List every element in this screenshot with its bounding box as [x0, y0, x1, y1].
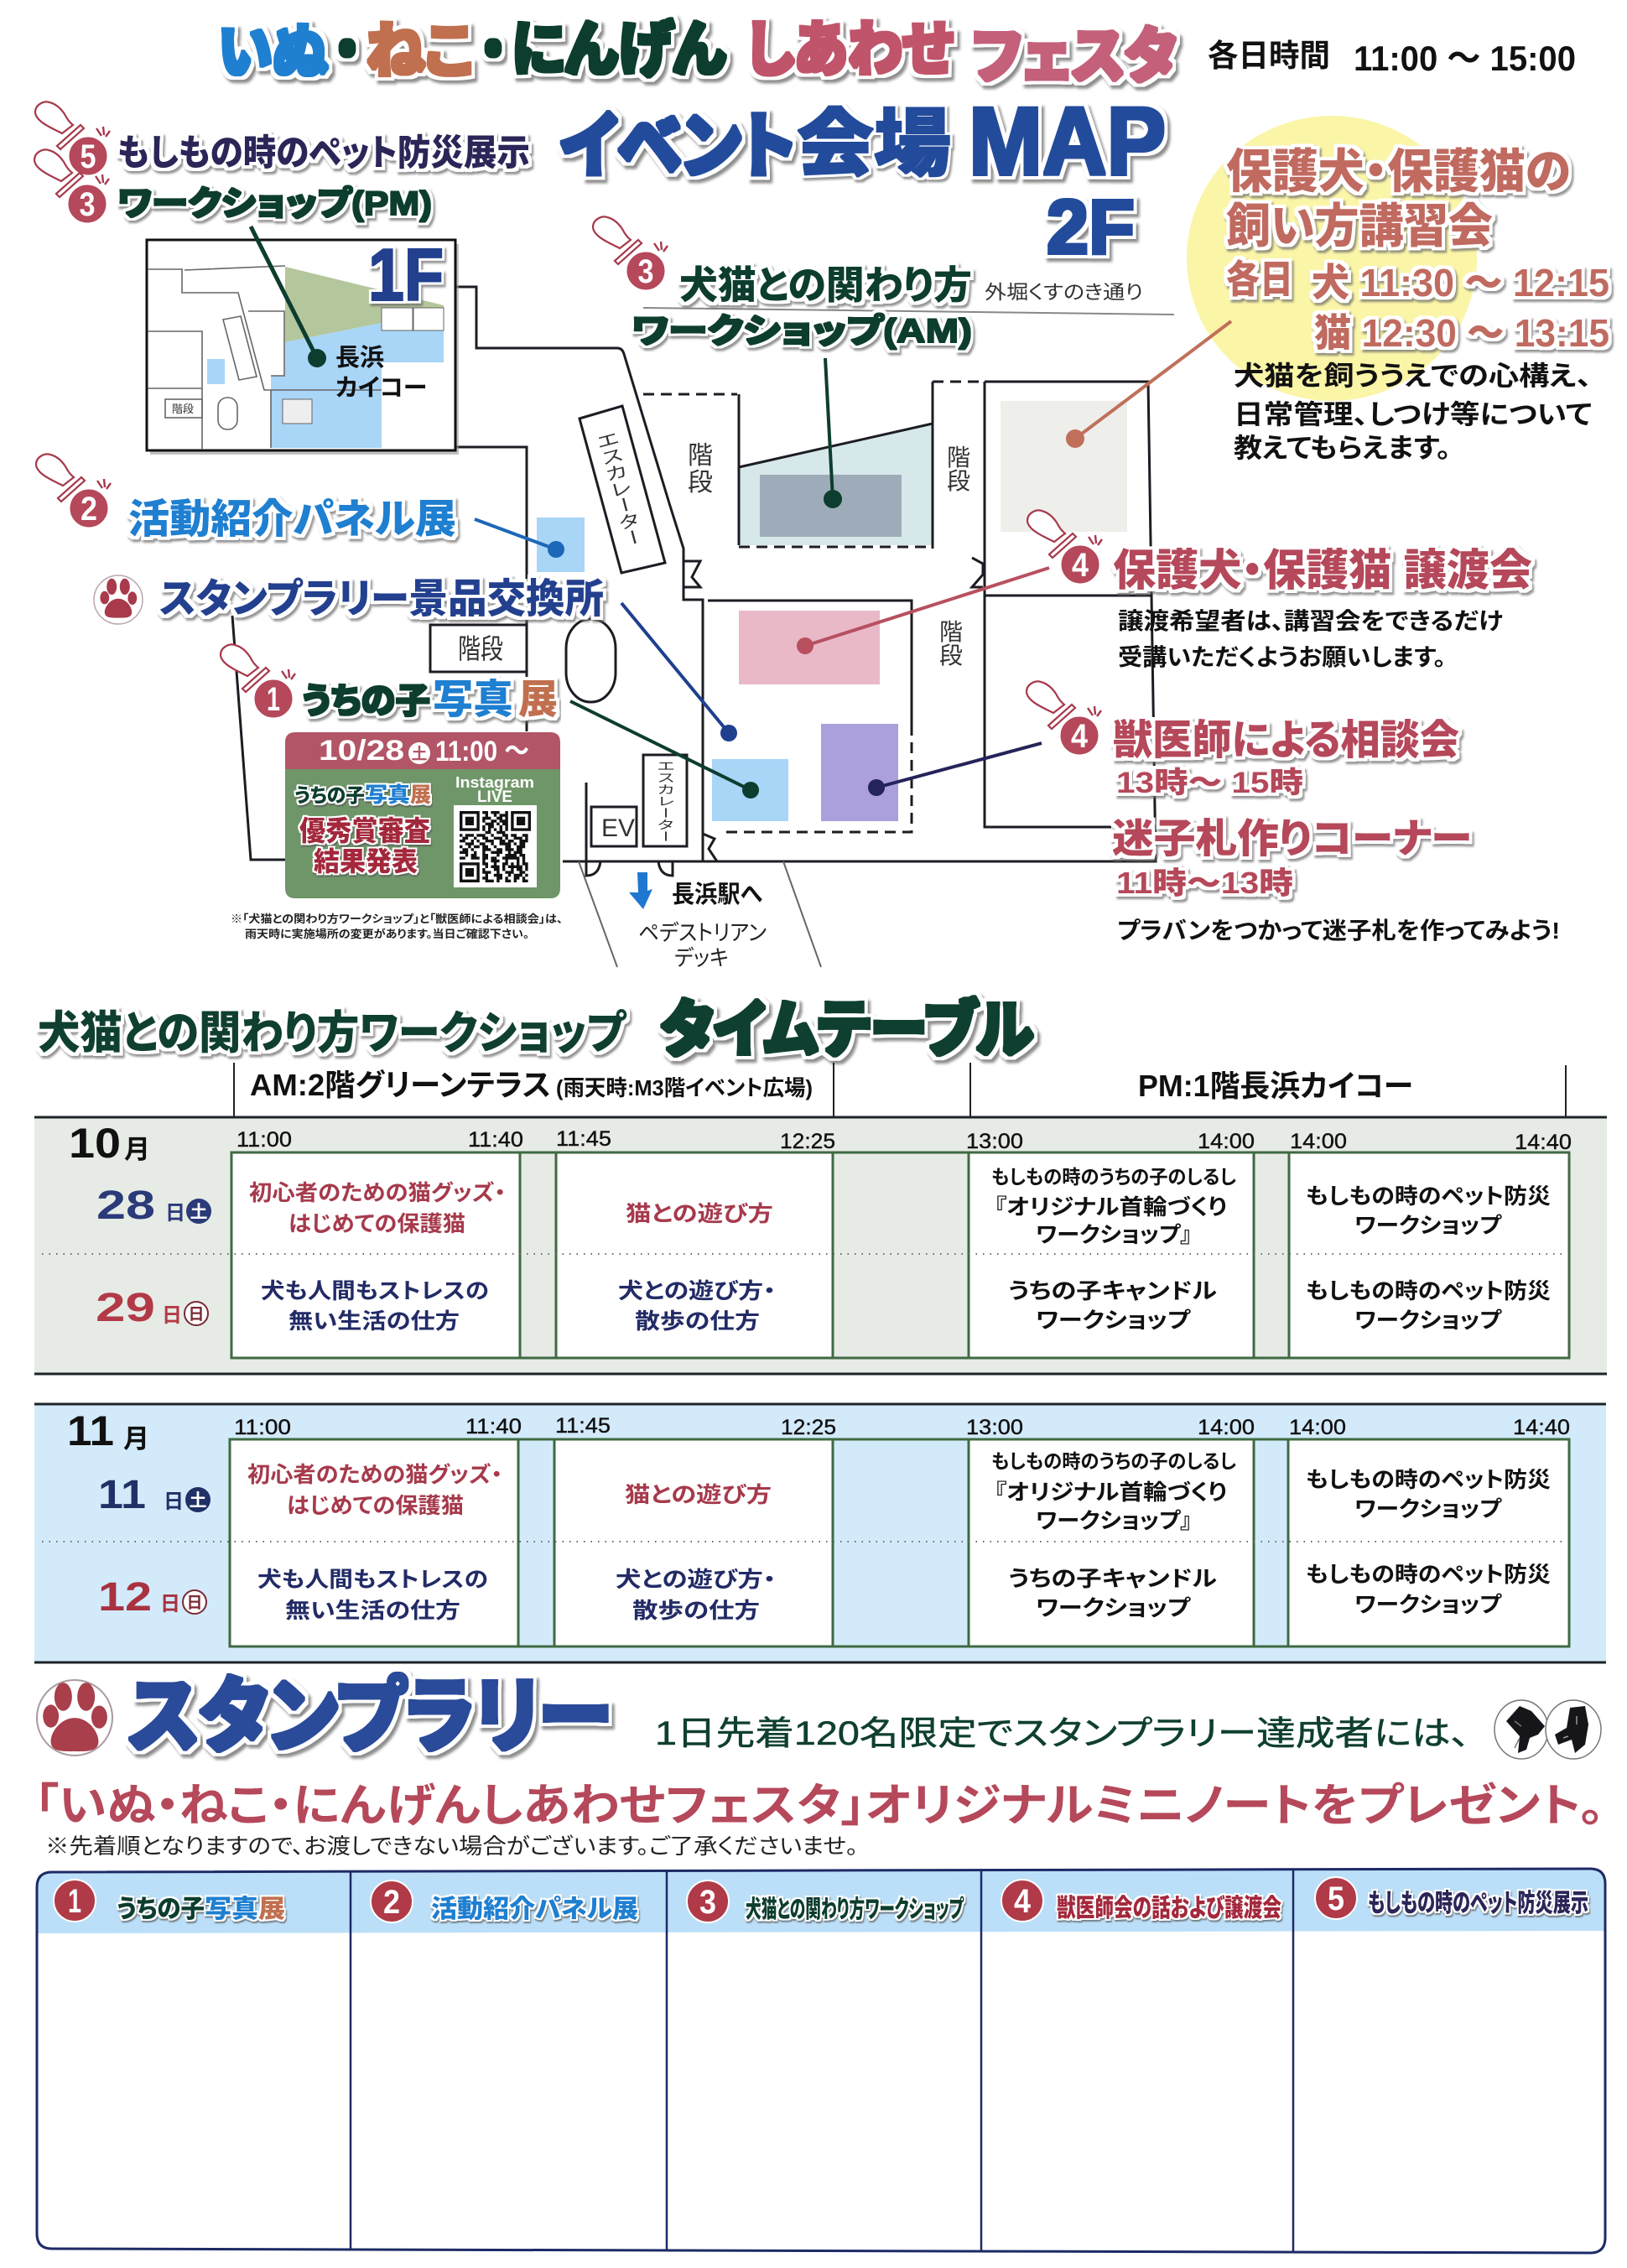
heading: workshop timetable: タイムテーブル: [661, 995, 1033, 1064]
October times: 12:25: [780, 1130, 835, 1153]
callout: lost pet tag corner: 11時〜13時: [1116, 866, 1293, 900]
card title: [294, 783, 431, 807]
October month: 月: [124, 1135, 150, 1164]
October times: 14:00: [1290, 1130, 1347, 1153]
title: ねこ: [366, 18, 474, 86]
date: 29 Sunday: 日: [188, 1306, 205, 1324]
callout 4: veterinary consultation: 13時〜 15時: [1116, 767, 1303, 799]
October month: 10: [69, 1120, 121, 1167]
date: 28 Saturday: 28: [96, 1183, 155, 1228]
October sessions: 猫との遊び方: [626, 1201, 773, 1226]
callout 4: adoption event: [1027, 510, 1532, 596]
date: 29 Sunday: 29: [96, 1286, 155, 1330]
November sessions: ワークショップ: [1354, 1496, 1502, 1522]
callout 3: workshop AM: 3: [637, 253, 654, 290]
card title: 展: [410, 783, 431, 807]
callout 1: photo exhibit: 1: [267, 681, 280, 718]
date: 10/28: [319, 735, 404, 767]
stamp cell 1: 1: [68, 1883, 81, 1920]
November sessions: 犬との遊び方・: [616, 1567, 776, 1592]
November sessions: 猫との遊び方: [625, 1482, 772, 1507]
icon: dog and cat: [1494, 1700, 1601, 1759]
stamp cell 5: [1315, 1877, 1588, 1919]
date: 28 Saturday: [96, 1183, 211, 1228]
panel exhibition area: [537, 518, 585, 572]
callout 5: pet disaster exhibit: 5: [81, 138, 96, 175]
street underline: [643, 308, 1174, 315]
October times: 11:45: [556, 1127, 611, 1151]
date: 29 Sunday: 日: [162, 1304, 182, 1327]
November sessions: 散歩の仕方: [632, 1598, 760, 1623]
November times: 14:00: [1198, 1416, 1255, 1439]
November sessions: 初心者のための猫グッズ・: [247, 1462, 502, 1487]
date: 11 Saturday: 日: [164, 1490, 184, 1513]
date: 28 Saturday: 土: [190, 1203, 208, 1222]
veterinarian area purple: [821, 724, 898, 821]
leader lines and dots: [475, 321, 1231, 798]
stairs label 2: 階: [947, 445, 970, 471]
inset map 1F: [147, 226, 459, 455]
callout 4: adoption event: 保護犬・保護猫 譲渡会: [1113, 547, 1532, 596]
QR code: [454, 805, 537, 887]
1F label: 1F: [368, 233, 444, 316]
heading: event venue map: MAP: [969, 88, 1166, 195]
opening hours: [1208, 39, 1576, 78]
arrow: to Nagahama station: [629, 872, 652, 909]
October times: 14:00: [1198, 1130, 1255, 1153]
stamp cell 1: 写真: [205, 1896, 258, 1923]
callout 1: photo exhibit: 写真: [433, 678, 513, 722]
callout 3: workshop PM: 3: [79, 186, 96, 223]
stairs label 2: 段: [947, 468, 970, 494]
callout 5: pet disaster exhibit: もしもの時のペット防災展示: [117, 133, 530, 174]
photo exhibition area blue: [712, 759, 788, 821]
adoption class description: 日常管理、しつけ等について: [1234, 399, 1592, 429]
stamp cell 4: 4: [1014, 1883, 1032, 1920]
rain notice: ※「犬猫との関わり方ワークショップ」と「獣医師による相談会」は、: [231, 913, 563, 925]
date: 11 Saturday: [98, 1473, 211, 1517]
callout 5: pet disaster exhibit: [35, 102, 530, 176]
street label: 外堀くすのき通り: [985, 281, 1143, 303]
stamp rally limit text: 1日先着120名限定でスタンプラリー達成者には、: [655, 1715, 1470, 1752]
callout: lost pet tag corner: [1112, 817, 1472, 900]
callout 4: veterinary consultation: 獣医師による相談会: [1113, 718, 1459, 763]
title: しあわせ: [746, 17, 954, 84]
stairs label 1: 段: [688, 469, 713, 497]
stamp cell 3: 犬猫との関わり方ワークショップ: [746, 1896, 964, 1923]
building walls: [232, 287, 1156, 967]
November sessions: 犬も人間もストレスの: [257, 1567, 488, 1592]
stamp cell 3: 3: [699, 1884, 716, 1921]
title: いぬ: [218, 19, 328, 86]
first come notice: ※先着順となりますので、お渡しできない場合がございます。ご了承くださいませ。: [45, 1834, 858, 1859]
station label: 長浜駅へ: [672, 881, 763, 908]
stairs label 1: 階: [688, 442, 713, 470]
date: 11:00 〜: [435, 736, 529, 767]
stamp cell 1: [54, 1880, 285, 1923]
callout 3: workshop AM: ワークショップ(AM): [632, 313, 972, 350]
escalator label 2: エスカレーター: [654, 760, 676, 842]
heading: workshop timetable: 犬猫との関わり方ワークショップ: [38, 1008, 626, 1059]
November times: 11:45: [555, 1414, 611, 1438]
October sessions: 散歩の仕方: [635, 1308, 760, 1334]
rain notice: 雨天時に実施場所の変更があります。当日ご確認下さい。: [245, 928, 529, 940]
November sessions: [247, 1450, 1551, 1623]
October sessions: ワークショップ: [1036, 1308, 1191, 1333]
callout 3: workshop PM: ワークショップ(PM): [117, 185, 432, 222]
panel: stamp card: [37, 1869, 1605, 2253]
November cells: [42, 1439, 1569, 1646]
rain venue: (雨天時:M3階イベント広場): [556, 1075, 813, 1100]
October sessions: ワークショップ』: [1036, 1222, 1192, 1247]
November times: 14:00: [1289, 1416, 1346, 1439]
rain notice: [231, 913, 563, 940]
date: 12 Sunday: 日: [186, 1594, 203, 1612]
stamp cell 1: うちの子: [117, 1896, 205, 1923]
present text: 「いぬ・ねこ・にんげんしあわせフェスタ」オリジナルミニノートをプレゼント。: [34, 1781, 1604, 1831]
adoption event description: 受講いただくようお願いします。: [1118, 644, 1446, 670]
date: 11 Saturday: 土: [190, 1491, 206, 1511]
November sessions: 『オリジナル首輪づくり: [995, 1480, 1227, 1505]
opening hours: 11:00 〜 15:00: [1354, 39, 1576, 78]
November times: 11:00: [234, 1416, 291, 1439]
stamp cell 1: 展: [258, 1896, 285, 1923]
October times: 11:00: [237, 1128, 292, 1152]
card title: 写真: [365, 783, 410, 807]
adoption area pink: [739, 611, 880, 684]
callout 4: veterinary consultation: [1027, 681, 1459, 799]
callout: adoption class: 各日: [1226, 257, 1293, 301]
adoption class room: [1001, 401, 1127, 532]
deck label: [638, 920, 767, 970]
floor map 2F: [232, 281, 1174, 970]
stairs label 4: 階段: [458, 633, 503, 664]
callout 2: activity panels: 活動紹介パネル展: [128, 497, 456, 542]
October sessions: 犬も人間もストレスの: [261, 1278, 489, 1303]
title: [218, 17, 1177, 91]
yellow circle behind adoption class: [1187, 116, 1477, 401]
card: instagram live announcement: [285, 732, 560, 898]
title: フェスタ: [972, 23, 1177, 91]
October sessions: うちの子キャンドル: [1008, 1278, 1217, 1303]
October times: 11:40: [468, 1128, 523, 1152]
map labels: [458, 281, 1143, 842]
heading: 2F: 2F: [1047, 185, 1135, 270]
stamp cell 3: [687, 1880, 964, 1923]
callout: stamp rally prize exchange: スタンプラリー景品交換所: [159, 577, 604, 622]
November sessions: うちの子キャンドル: [1008, 1566, 1217, 1591]
heading: event venue map: イベント: [560, 107, 795, 187]
November times: [234, 1414, 1570, 1439]
October times: 14:40: [1515, 1131, 1572, 1154]
callout 1: photo exhibit: 展: [518, 678, 558, 722]
deck label: デッキ: [674, 945, 729, 970]
date: 29 Sunday: [96, 1286, 208, 1330]
callout: adoption class: 飼い方講習会: [1226, 200, 1493, 252]
November sessions: ワークショップ: [1354, 1592, 1502, 1617]
November times: 12:25: [781, 1416, 836, 1439]
callout: lost pet tag corner: 迷子札作りコーナー: [1112, 817, 1472, 861]
Nagahama Kaiko label: カイコー: [335, 375, 427, 402]
date: [319, 735, 529, 767]
terrace area: [739, 424, 933, 545]
November sessions: もしもの時のペット防災: [1306, 1467, 1551, 1492]
callout: adoption class: 保護犬・保護猫の: [1226, 145, 1571, 198]
heading: stamp rally: スタンプラリー: [128, 1670, 612, 1762]
instagram live label: Instagram: [455, 774, 534, 791]
callout: adoption class: [1226, 145, 1609, 355]
callout 3: workshop AM: [593, 216, 972, 350]
heading: event venue map: [560, 88, 1166, 195]
date: 12 Sunday: 12: [98, 1575, 152, 1620]
AM venue: AM:2階グリーンテラス: [250, 1068, 551, 1102]
November month: [67, 1407, 149, 1454]
award announcement: 結果発表: [314, 846, 418, 877]
heading: workshop timetable: [38, 995, 1033, 1064]
October sessions: もしもの時のうちの子のしるし: [991, 1166, 1236, 1188]
line to venue: [251, 226, 317, 358]
lost pet tag description: プラバンをつかって迷子札を作ってみよう!: [1117, 918, 1560, 944]
award announcement: [299, 815, 430, 877]
adoption class description: 犬猫を飼ううえでの心構え、: [1234, 361, 1592, 391]
October sessions: もしもの時のペット防災: [1306, 1278, 1551, 1303]
adoption event description: [1118, 608, 1503, 670]
adoption class description: [1234, 361, 1592, 463]
November sessions: ワークショップ』: [1036, 1508, 1192, 1533]
PM venue: PM:1階長浜カイコー: [1138, 1069, 1413, 1103]
timetable column headers: [234, 1063, 1566, 1118]
November sessions: ワークショップ: [1036, 1595, 1191, 1620]
October month: [69, 1120, 150, 1167]
escalator label 1: エスカレーター: [591, 429, 647, 549]
date: 12 Sunday: 日: [160, 1593, 180, 1615]
November sessions: はじめての保護猫: [287, 1493, 464, 1518]
heading: event venue map: 会場: [797, 102, 951, 185]
icon: paw print: [37, 1680, 112, 1756]
award announcement: 優秀賞審査: [299, 815, 430, 846]
title: にんげん: [512, 17, 725, 84]
callout 4: adoption event: 4: [1072, 547, 1089, 584]
October cells: [42, 1152, 1569, 1358]
October sessions: はじめての保護猫: [288, 1211, 465, 1236]
panel: October timetable: [34, 1117, 1607, 1374]
date: 11 Saturday: 11: [98, 1473, 146, 1517]
adoption class description: 教えてもらえます。: [1234, 433, 1451, 463]
November sessions: もしもの時のうちの子のしるし: [991, 1450, 1236, 1472]
callout 4: veterinary consultation: 4: [1071, 718, 1089, 755]
November times: 14:40: [1513, 1416, 1570, 1439]
November sessions: 無い生活の仕方: [285, 1598, 460, 1623]
callout: adoption class: 犬 11:30 〜 12:15: [1312, 261, 1609, 304]
1F stairs labels: 階段: [172, 403, 194, 415]
date: 28 Saturday: 日: [165, 1202, 185, 1225]
October sessions: 初心者のための猫グッズ・: [249, 1180, 506, 1205]
EV label: EV: [601, 814, 635, 842]
date: 土: [411, 745, 428, 763]
stamp cell 2: 2: [383, 1884, 400, 1921]
callout 2: activity panels: [36, 455, 456, 542]
panel: November timetable: [34, 1404, 1606, 1662]
October times: 13:00: [966, 1130, 1023, 1153]
stairs label 3: 階: [939, 619, 963, 645]
October sessions: [249, 1166, 1551, 1334]
callout: adoption class: 猫 12:30 〜 13:15: [1314, 311, 1609, 355]
stamp cell 4: [1001, 1880, 1281, 1922]
November sessions: もしもの時のペット防災: [1306, 1562, 1551, 1587]
adoption event description: 譲渡希望者は、講習会をできるだけ: [1118, 608, 1503, 634]
November month: 月: [123, 1424, 149, 1454]
stamp cell 4: 獣医師会の話および譲渡会: [1057, 1895, 1281, 1922]
stamp cell 2: [371, 1880, 638, 1923]
November times: 13:00: [966, 1416, 1023, 1439]
callout 2: activity panels: 2: [81, 491, 97, 528]
opening hours: 各日時間: [1208, 39, 1330, 73]
title: ・: [335, 18, 360, 85]
October sessions: 『オリジナル首輪づくり: [995, 1194, 1227, 1220]
instagram live label: [455, 774, 534, 806]
November times: 11:40: [465, 1415, 522, 1438]
instagram live label: LIVE: [477, 788, 512, 806]
October times: [237, 1127, 1572, 1154]
card title: うちの子: [294, 784, 365, 806]
October sessions: 犬との遊び方・: [618, 1278, 776, 1303]
stamp cell 5: 5: [1328, 1880, 1344, 1917]
Nagahama Kaiko label: 長浜: [335, 344, 384, 372]
date: 12 Sunday: [98, 1575, 206, 1620]
November month: 11: [67, 1407, 114, 1454]
callout 1: photo exhibit: うちの子: [302, 681, 430, 720]
October sessions: ワークショップ: [1354, 1308, 1502, 1333]
stamp cell 2: 活動紹介パネル展: [431, 1896, 638, 1923]
October sessions: ワークショップ: [1354, 1213, 1502, 1238]
callout 3: workshop AM: 犬猫との関わり方: [679, 263, 972, 307]
callout 1: photo exhibit: [221, 644, 558, 722]
title: ・: [481, 18, 506, 85]
stairs label 3: 段: [939, 642, 963, 668]
callout 3: workshop PM: [34, 149, 432, 224]
October sessions: もしもの時のペット防災: [1306, 1183, 1551, 1209]
deck label: ペデストリアン: [638, 920, 767, 945]
dot: [308, 349, 326, 367]
October sessions: 無い生活の仕方: [288, 1308, 460, 1334]
